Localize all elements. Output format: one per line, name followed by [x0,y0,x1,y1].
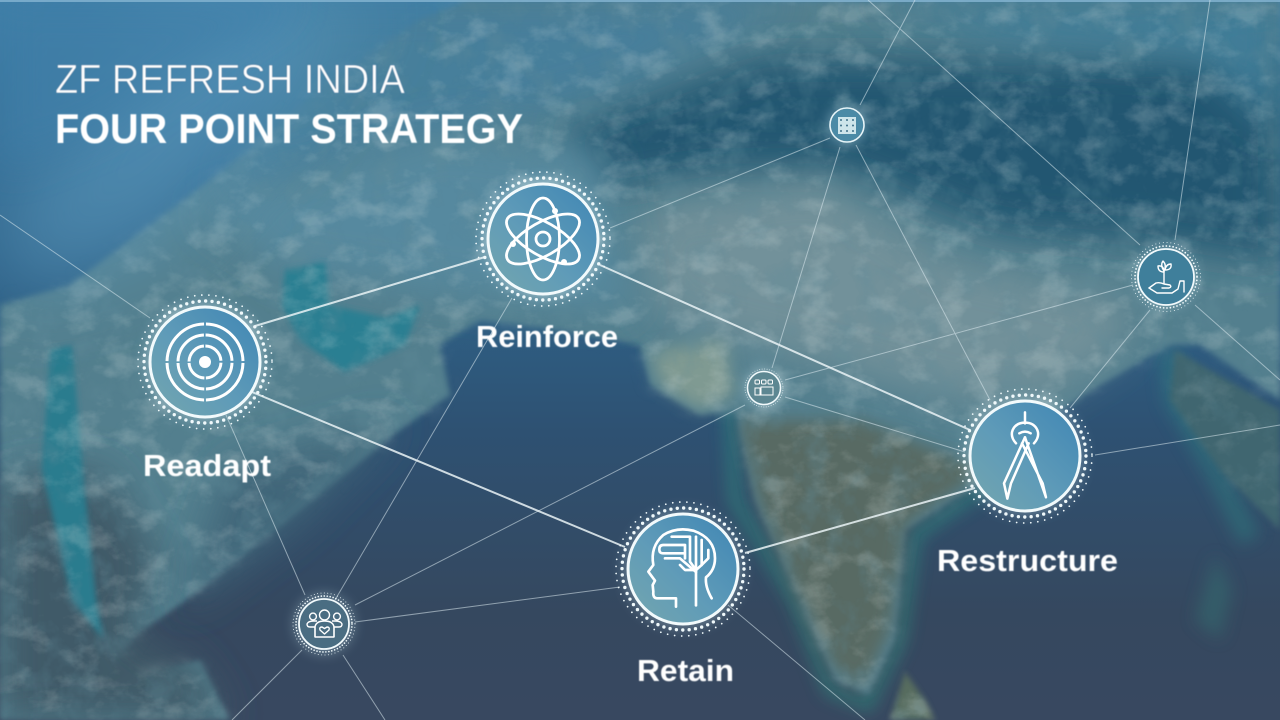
node: plant in hand [1132,242,1200,312]
Iran upper land haze [200,130,630,310]
lower coast dim [180,420,400,610]
top center blue haze [220,0,800,200]
northern plains [640,180,1130,400]
title: ZF REFRESH INDIA [55,56,406,102]
icon: atom [499,198,587,280]
top edge highlight [0,0,1280,2]
icon: target [167,324,243,400]
Arabia dark lower tone [0,470,230,720]
Gujarat bright land [650,340,735,410]
label: Retain: Retain [637,653,734,688]
coast shallows [730,400,1010,705]
node: Restructure [958,389,1092,523]
Indian peninsula tone [740,420,985,690]
icon: data grid [838,117,856,134]
node: logistics [744,368,784,408]
Persian Gulf [282,262,420,372]
northern dark mountain band [560,50,1280,260]
label: Reinforce: Reinforce [476,319,618,354]
Red Sea [42,345,104,640]
label: Restructure: Restructure [937,543,1118,578]
node: Retain [616,502,750,636]
node: Readapt [138,295,272,429]
icon: truck and boxes [755,380,773,395]
title: FOUR POINT STRATEGY [55,105,523,152]
node: data grid [827,105,867,145]
far east land [1170,350,1280,530]
label: Readapt: Readapt [143,448,271,483]
icon: people [307,610,342,637]
Sri Lanka [890,672,935,720]
title [55,56,523,152]
icon: brain circuit head [648,529,715,607]
node: Reinforce [476,172,610,306]
node: people and heart [293,593,355,655]
icon: plant in hand [1149,261,1184,293]
top right lighter band [860,0,1280,130]
atmospheric haze top left [0,0,380,300]
network: thick primary connector lines [252,257,975,553]
icon: drafting compass [1004,412,1046,499]
